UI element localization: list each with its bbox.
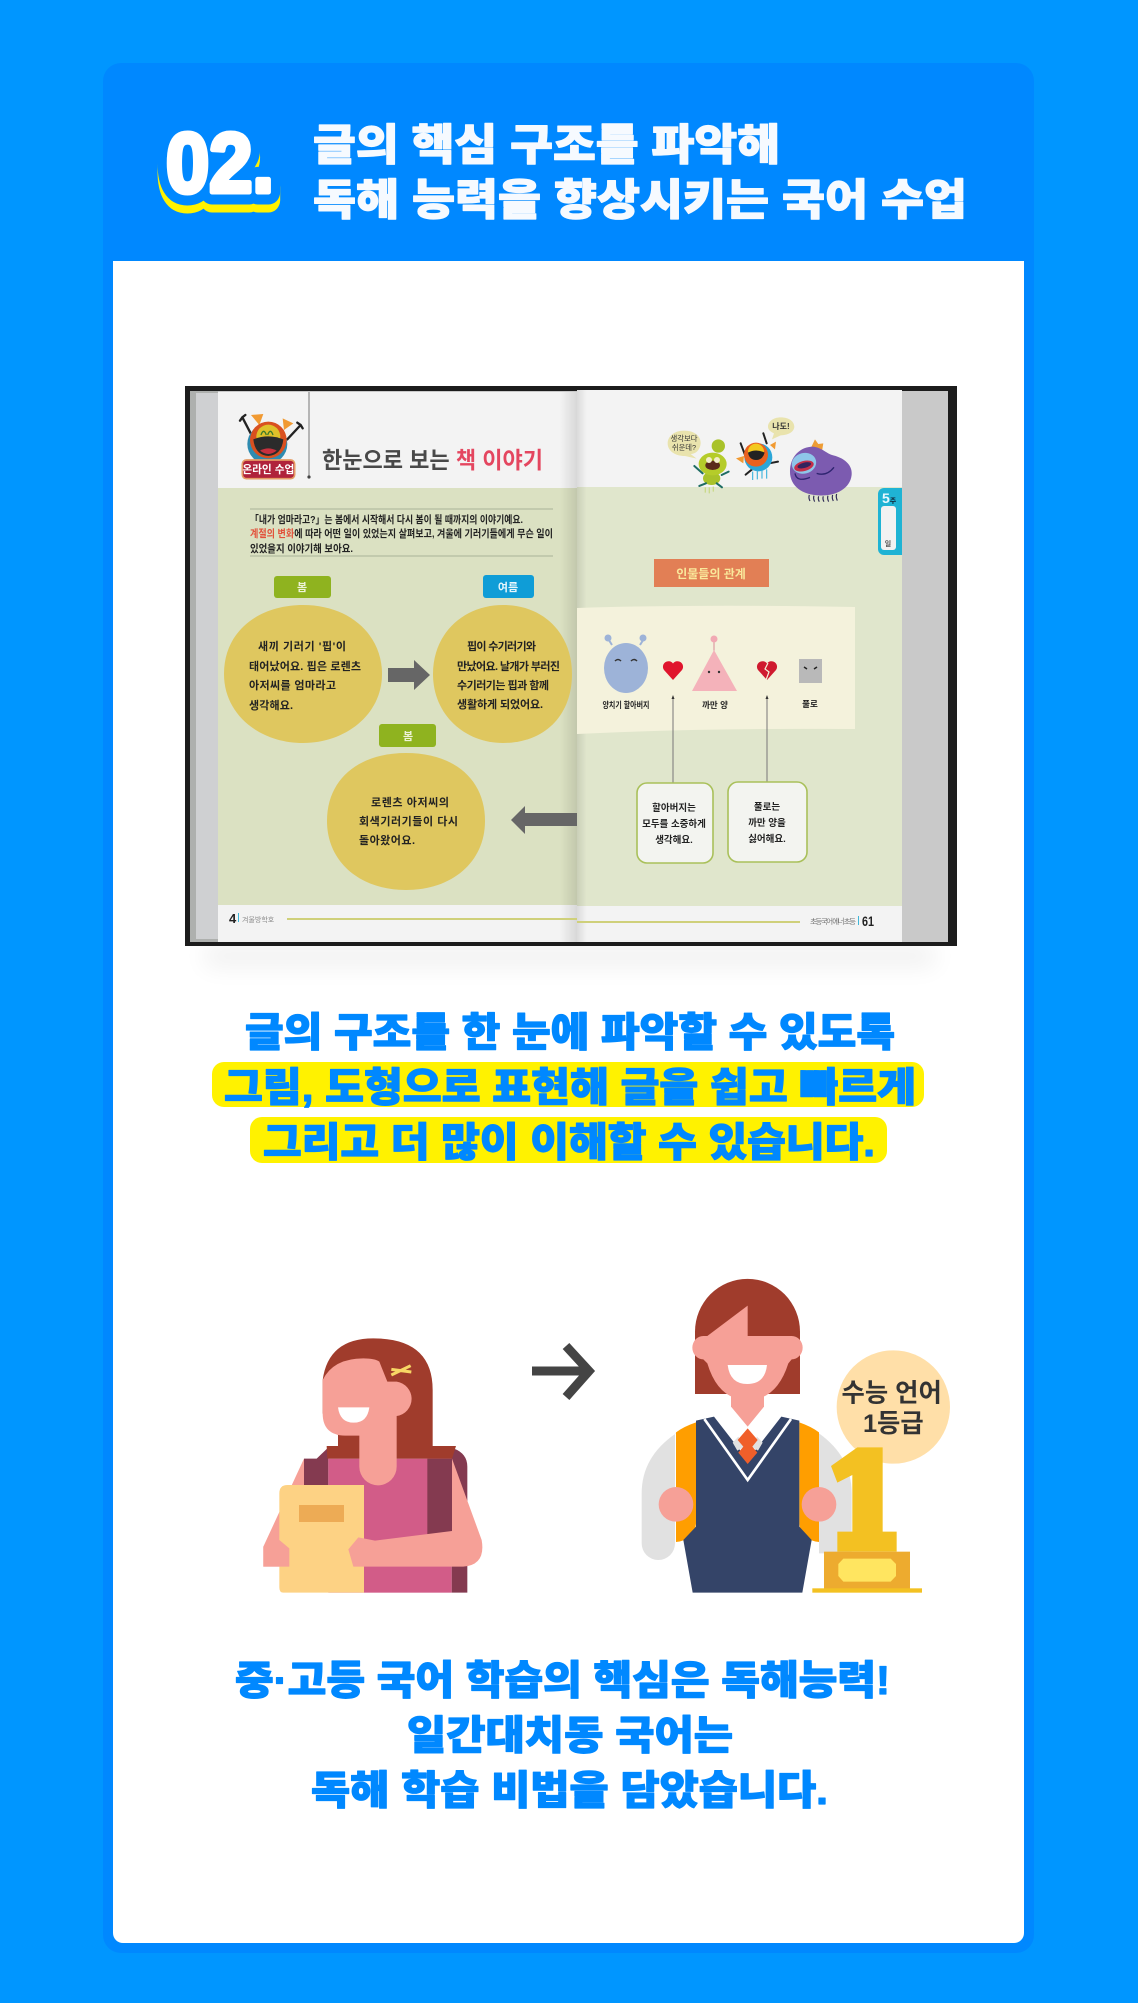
side tab: week 5 xyxy=(878,488,902,555)
illustration: girl student xyxy=(263,1338,482,1593)
note box: pollo: 풀로는 xyxy=(754,802,780,813)
intro paragraph: 「내가 엄마라고?」는 봄에서 시작해서 다시 봄이 될 때까지의 이야기예요. xyxy=(250,513,523,526)
left hand xyxy=(263,1540,289,1567)
icon: online class mascot xyxy=(240,414,303,479)
section number 02: 02. xyxy=(166,116,274,210)
footer right xyxy=(577,913,874,929)
blob: summer story xyxy=(433,605,572,743)
left arm xyxy=(263,1459,304,1567)
footer left: 겨울방학호 xyxy=(242,915,275,924)
note box: grandpa: 할아버지는 xyxy=(652,802,696,814)
smile xyxy=(338,1407,369,1423)
blob: return story: 로렌츠 아저씨의 xyxy=(371,795,449,809)
caption: reading structure xyxy=(212,1011,924,1165)
strap xyxy=(427,1459,452,1535)
intro paragraph xyxy=(250,509,553,556)
badge: first grade: 수능 언어 xyxy=(842,1379,942,1407)
character: pollo xyxy=(799,659,822,709)
blob: spring story: 새끼 기러기 '핍'이 xyxy=(258,639,346,653)
note box: grandpa xyxy=(637,783,713,863)
caption: reading structure: 글의 구조를 한 눈에 파악할 수 있도록 xyxy=(245,1011,895,1055)
blob: spring story: 태어났어요. 핍은 로렌츠 xyxy=(249,659,361,673)
smile xyxy=(728,1365,767,1384)
hair xyxy=(323,1338,456,1459)
face and neck xyxy=(323,1358,412,1485)
blob: return story xyxy=(327,753,485,890)
section number 02: 02. xyxy=(166,116,274,210)
hair xyxy=(695,1279,800,1394)
tie xyxy=(733,1428,763,1464)
purple mascot xyxy=(789,439,852,502)
arrow: left xyxy=(511,806,577,834)
label: spring xyxy=(274,576,331,598)
footer right: 61 xyxy=(862,913,874,929)
blob: spring story: 아저씨를 엄마라고 xyxy=(249,678,336,692)
icon: broken heart xyxy=(757,661,777,680)
caption: reading skill: 중·고등 국어 학습의 핵심은 독해능력! xyxy=(235,1659,890,1703)
note box: grandpa: 생각해요. xyxy=(655,834,693,846)
heading text: 글의 핵심 구조를 파악해 xyxy=(313,122,780,170)
label: spring again xyxy=(379,724,436,747)
character: black sheep xyxy=(692,636,737,710)
heading text xyxy=(313,122,967,225)
face xyxy=(692,1306,803,1400)
green mascot xyxy=(694,439,729,493)
sleeves xyxy=(642,1433,676,1560)
illustration: top student with trophy xyxy=(642,1279,950,1593)
page title: 한눈으로 보는 책 이야기 xyxy=(322,447,543,473)
blob: spring story: 생각해요. xyxy=(249,699,293,712)
heading text: 독해 능력을 향상시키는 국어 수업 xyxy=(313,177,967,225)
label: spring again: 봄 xyxy=(403,730,413,743)
header xyxy=(166,116,967,225)
dress xyxy=(328,1459,452,1593)
blob: return story: 돌아왔어요. xyxy=(359,833,415,847)
neck xyxy=(731,1393,764,1427)
speech bubble 1: 쉬운데? xyxy=(672,443,696,452)
intro paragraph: 계절의 변화에 따라 어떤 일이 있었는지 살펴보고, 겨울에 기러기들에게 무슨 일이 xyxy=(250,527,553,540)
orange mascot xyxy=(736,433,778,480)
blob: spring story xyxy=(224,605,382,743)
caption: reading skill xyxy=(235,1659,890,1813)
hands xyxy=(659,1487,693,1522)
book cover xyxy=(185,386,957,946)
icon: online class mascot: 온라인 수업 xyxy=(242,463,294,476)
note box: pollo: 까만 양을 xyxy=(748,817,786,829)
badge: first grade xyxy=(837,1350,950,1464)
arrow: progress xyxy=(532,1346,589,1397)
label: character relations xyxy=(654,559,769,587)
shadow under book xyxy=(205,945,935,967)
arrow: right xyxy=(388,660,430,690)
speech bubble 2 xyxy=(768,417,794,439)
blob: summer story: 만났어요. 날개가 부러진 xyxy=(457,659,560,673)
blob: summer story: 수기러기는 핍과 함께 xyxy=(457,678,549,692)
left page xyxy=(218,392,578,942)
badge: first grade: 1등급 xyxy=(863,1410,924,1438)
trophy xyxy=(812,1447,922,1593)
section number 02: 02. xyxy=(166,124,274,218)
label: spring: 봄 xyxy=(297,581,307,594)
character: black sheep: 까만 양 xyxy=(702,700,728,710)
book illustration xyxy=(185,386,957,946)
footer left: 4 xyxy=(229,911,237,926)
blob: summer story: 생활하게 되었어요. xyxy=(457,697,543,711)
blob: summer story: 핍이 수기러기와 xyxy=(467,639,536,653)
panel: card xyxy=(103,63,1034,1953)
label: character relations: 인물들의 관계 xyxy=(676,567,746,581)
footer right: 초등국어 에너 초등 xyxy=(810,916,856,926)
side tab: week 5: 5주 xyxy=(882,490,897,506)
arrow: pollo note xyxy=(766,695,768,782)
footer left xyxy=(229,911,577,926)
blob: return story: 회색기러기들이 다시 xyxy=(359,814,458,828)
speech bubble 1 xyxy=(668,431,701,459)
right page xyxy=(577,390,902,942)
caption: reading structure: 그리고 더 많이 이해할 수 있습니다. xyxy=(263,1121,875,1165)
panel: character relations diagram xyxy=(577,606,855,734)
speech bubble 1: 생각보다 xyxy=(671,434,698,443)
caption: reading skill: 독해 학습 비법을 담았습니다. xyxy=(311,1769,828,1813)
label: summer xyxy=(483,575,534,598)
icon: heart xyxy=(663,661,683,680)
divider with dot xyxy=(308,392,310,476)
speech bubble 2: 나도! xyxy=(772,421,790,431)
backpack xyxy=(304,1448,467,1593)
intro paragraph: 있었을지 이야기해 보아요. xyxy=(250,542,353,555)
hair clip xyxy=(391,1366,411,1375)
orange straps xyxy=(676,1422,819,1542)
vest xyxy=(683,1417,812,1593)
label: summer: 여름 xyxy=(498,580,518,594)
caption: reading structure: 그림, 도형으로 표현해 글을 쉽고 빠르게 xyxy=(224,1066,916,1110)
note box: pollo xyxy=(728,782,807,862)
character: grandpa: 양치기 할아버지 xyxy=(602,700,650,710)
character: grandpa xyxy=(602,634,650,710)
mascots with speech bubbles xyxy=(668,417,852,502)
folder xyxy=(279,1485,364,1593)
side tab: week 5: 일 xyxy=(885,539,891,548)
note box: grandpa: 모두를 소중하게 xyxy=(642,818,706,830)
right arm xyxy=(348,1459,482,1567)
caption: reading skill: 일간대치동 국어는 xyxy=(407,1714,733,1758)
note box: pollo: 싫어해요. xyxy=(748,833,786,845)
character: pollo: 풀로 xyxy=(802,699,818,709)
arrow: grandpa note xyxy=(672,695,674,783)
